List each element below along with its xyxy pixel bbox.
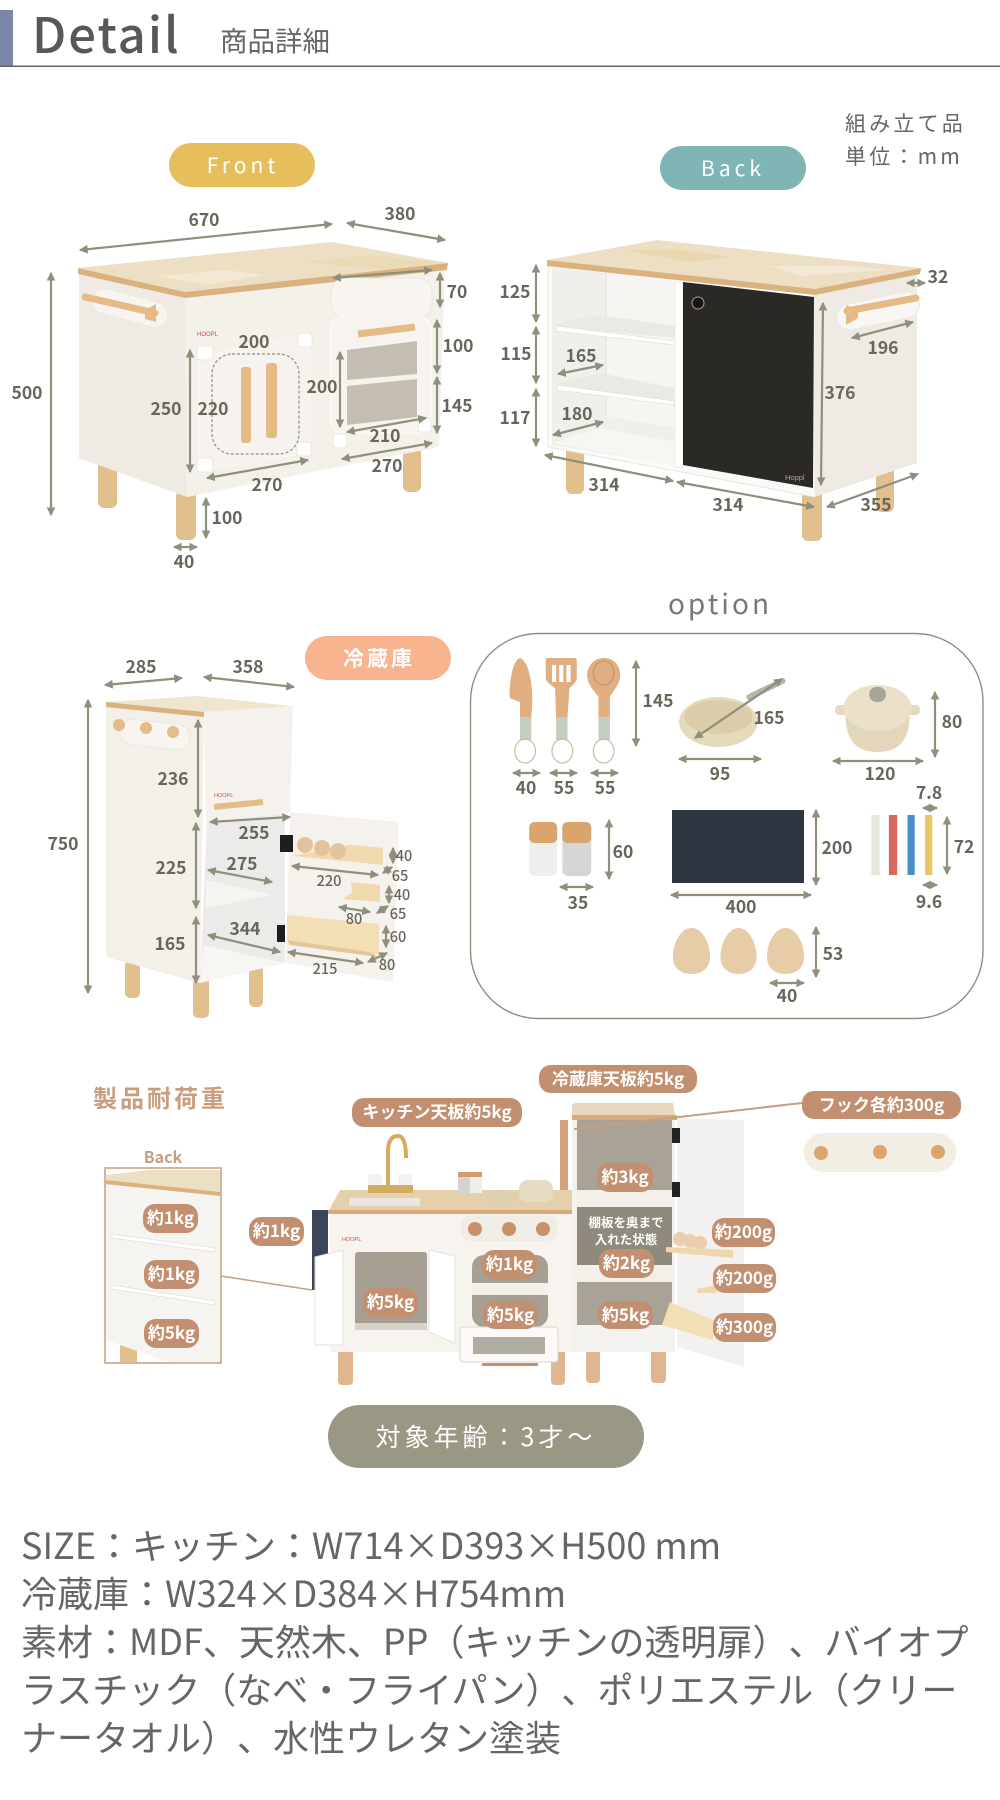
dimension labels: front: 200 — [239, 329, 269, 354]
dimension labels: option: 80 — [942, 709, 962, 734]
text block: size and materials: 素材：MDF、天然木、PP（キッチンの透明扉）、バイオプ — [21, 1614, 968, 1666]
dimension arrows: option — [513, 661, 947, 983]
dimension labels: option: 9.6 — [916, 889, 942, 914]
dimension labels: back: 196 — [868, 335, 898, 360]
illustration: refrigerator: HOOPL — [214, 793, 233, 799]
dimension labels: front — [12, 201, 473, 574]
text block: size and materials: SIZE：キッチン：W714×D393×H500 mm — [21, 1518, 721, 1570]
dimension arrows: back — [536, 265, 925, 507]
badge: door shelf top: 約200g — [715, 1218, 772, 1243]
icon: chalk — [871, 815, 932, 875]
badge: shelf middle: 約1kg — [148, 1260, 195, 1285]
dimension labels: refrigerator: 275 — [227, 851, 257, 876]
text block: size and materials: ナータオル）、水性ウレタン塗装 — [21, 1710, 561, 1762]
pill: Back — [660, 146, 806, 190]
text block: size and materials — [21, 1518, 968, 1762]
dimension arrows: refrigerator — [88, 677, 393, 993]
dimension labels: refrigerator: 165 — [155, 931, 185, 956]
badge: shelf top: 約1kg — [147, 1204, 194, 1229]
dimension labels: back: 125 — [500, 279, 530, 304]
dimension labels: refrigerator: 215 — [313, 958, 337, 979]
pill: target age: 対象年齢：3才～ — [376, 1418, 596, 1454]
dimension labels: refrigerator: 40 — [394, 884, 410, 905]
dimension labels: option: 145 — [643, 688, 673, 713]
connector line — [221, 1276, 312, 1290]
badge: fridge upper: 約3kg — [601, 1163, 649, 1188]
pill: refrigerator: 冷蔵庫 — [343, 643, 415, 673]
dimension labels: back — [500, 264, 948, 517]
dimension labels: front: 500 — [12, 380, 42, 405]
badge: oven bottom: 約5kg — [487, 1301, 534, 1326]
icon: eggs — [673, 928, 804, 974]
pill: refrigerator — [305, 636, 451, 680]
illustration: hook plate — [804, 1133, 956, 1172]
dimension labels: front: 380 — [385, 201, 415, 226]
dimension labels: option — [516, 688, 974, 1008]
badge: kitchen top: キッチン天板約5kg — [362, 1098, 512, 1123]
pill: Front: Front — [207, 150, 279, 180]
icon: frying pan — [679, 681, 782, 747]
dimension labels: front: 270 — [372, 453, 402, 478]
dimension labels: option: 53 — [823, 941, 843, 966]
dimension labels: back: 115 — [501, 341, 531, 366]
dimension labels: front: 210 — [370, 423, 400, 448]
badge: refrigerator top: 冷蔵庫天板約5kg — [552, 1065, 684, 1090]
dimension labels: option: 72 — [954, 834, 974, 859]
dimension labels: refrigerator: 80 — [379, 954, 395, 975]
dimension labels: back: 165 — [566, 343, 596, 368]
note: assembled, unit mm — [845, 108, 966, 171]
dimension labels: front: 100 — [212, 505, 242, 530]
badge: cabinet: 約5kg — [367, 1288, 414, 1313]
panel: refrigerator — [48, 654, 412, 1018]
icon: cleaner towel — [672, 810, 804, 883]
panel: option accessories — [470, 634, 983, 1018]
dimension labels: option: 165 — [754, 705, 784, 730]
illustration: refrigerator — [106, 696, 399, 1018]
header — [0, 0, 1000, 68]
panel outline — [470, 634, 983, 1018]
dimension labels: refrigerator: 344 — [230, 916, 260, 941]
dimension labels: front: 200 — [307, 374, 337, 399]
icon: knife, turner and spoon — [510, 658, 620, 763]
note: assembled, unit mm: 単位：mm — [845, 141, 963, 171]
dimension arrows: front — [51, 223, 445, 547]
illustration: shelf detail — [105, 1168, 221, 1363]
dimension labels: back: 314 — [589, 472, 619, 497]
header rule — [0, 66, 1000, 67]
heading: product load capacity: 製品耐荷重 — [93, 1079, 228, 1114]
pill: Front — [169, 143, 315, 187]
panel: kitchen front view — [12, 201, 473, 574]
illustration: kitchen with accessories — [312, 1103, 744, 1385]
dimension labels: option: 95 — [710, 761, 730, 786]
dimension labels: refrigerator: 750 — [48, 831, 78, 856]
dimension labels: option: 55 — [554, 775, 574, 800]
heading: option: option — [668, 583, 772, 623]
panel: load capacity, back shelves — [105, 1144, 312, 1363]
dimension labels: back: 117 — [500, 405, 530, 430]
badge: door shelf bottom: 約300g — [716, 1313, 773, 1338]
pill: Back: Back — [701, 153, 765, 183]
dimension labels: option: 120 — [865, 761, 895, 786]
dimension labels: refrigerator: 65 — [392, 865, 408, 886]
badge: fridge lower: 約5kg — [602, 1301, 649, 1326]
badge: towel bar: 約1kg — [253, 1217, 300, 1242]
dimension labels: option: 35 — [568, 890, 588, 915]
dimension labels: option: 400 — [726, 894, 756, 919]
dimension labels: front: 670 — [189, 207, 219, 232]
note: shelf pushed fully back — [588, 1212, 664, 1248]
subtitle: 商品詳細 — [220, 19, 330, 59]
dimension labels: front: 100 — [443, 333, 473, 358]
illustration: kitchen back — [547, 240, 922, 541]
dimension labels: refrigerator: 220 — [317, 870, 341, 891]
illustration: kitchen front — [78, 242, 448, 540]
dimension labels: option: 60 — [613, 839, 633, 864]
dimension labels: option: 40 — [777, 983, 797, 1008]
badge: oven top: 約1kg — [486, 1250, 533, 1275]
panel: kitchen back view — [500, 240, 948, 541]
badge: shelf bottom: 約5kg — [148, 1319, 195, 1344]
badge: fridge middle: 約2kg — [603, 1249, 650, 1274]
illustration: kitchen back: Hoppl — [785, 473, 805, 482]
dimension labels: refrigerator: 236 — [158, 766, 188, 791]
dimension labels: front: 250 — [151, 396, 181, 421]
dimension labels: front: 145 — [442, 393, 472, 418]
note: shelf pushed fully back: 棚板を奥まで — [588, 1212, 664, 1231]
illustration: kitchen front: HOOPL — [197, 332, 219, 338]
dimension labels: back: 376 — [825, 380, 855, 405]
illustration: kitchen with accessories: HOOPL — [342, 1237, 361, 1243]
text block: size and materials: ラスチック（なべ・フライパン）、ポリエステル（クリー — [21, 1662, 957, 1714]
dimension labels: option: 200 — [822, 835, 852, 860]
dimension labels: refrigerator: 255 — [239, 820, 269, 845]
icon: pot — [835, 685, 920, 752]
dimension labels: refrigerator: 80 — [346, 908, 362, 929]
note: shelf pushed fully back: 入れた状態 — [595, 1229, 658, 1248]
dimension labels: front: 70 — [447, 279, 467, 304]
dimension labels: front: 40 — [174, 549, 194, 574]
load badges — [143, 1065, 961, 1348]
dimension labels: back: 355 — [861, 492, 891, 517]
icon: salt and pepper shakers — [529, 822, 591, 876]
label: Back: Back — [144, 1144, 183, 1168]
dimension labels: refrigerator: 65 — [390, 903, 406, 924]
dimension labels: refrigerator: 40 — [396, 845, 412, 866]
header accent bar — [0, 10, 13, 66]
dimension labels: refrigerator: 358 — [233, 654, 263, 679]
badge: hooks: フック各約300g — [819, 1091, 944, 1116]
dimension labels: refrigerator — [48, 654, 412, 979]
dimension labels: refrigerator: 60 — [390, 926, 406, 947]
connector line: hook — [574, 1103, 802, 1129]
note: assembled, unit mm: 組み立て品 — [845, 108, 966, 138]
badge: door shelf middle: 約200g — [716, 1264, 773, 1289]
dimension labels: back: 314 — [713, 492, 743, 517]
dimension labels: back: 32 — [928, 264, 948, 289]
dimension labels: front: 270 — [252, 472, 282, 497]
dimension labels: front: 220 — [198, 396, 228, 421]
pill: target age — [328, 1405, 644, 1468]
dimension labels: option: 55 — [595, 775, 615, 800]
dimension labels: refrigerator: 285 — [126, 654, 156, 679]
dimension labels: refrigerator: 225 — [156, 855, 186, 880]
dimension labels: back: 180 — [562, 401, 592, 426]
text block: size and materials: 冷蔵庫：W324×D384×H754mm — [21, 1566, 566, 1618]
dimension labels: option: 7.8 — [916, 780, 942, 805]
dimension labels: option: 40 — [516, 775, 536, 800]
